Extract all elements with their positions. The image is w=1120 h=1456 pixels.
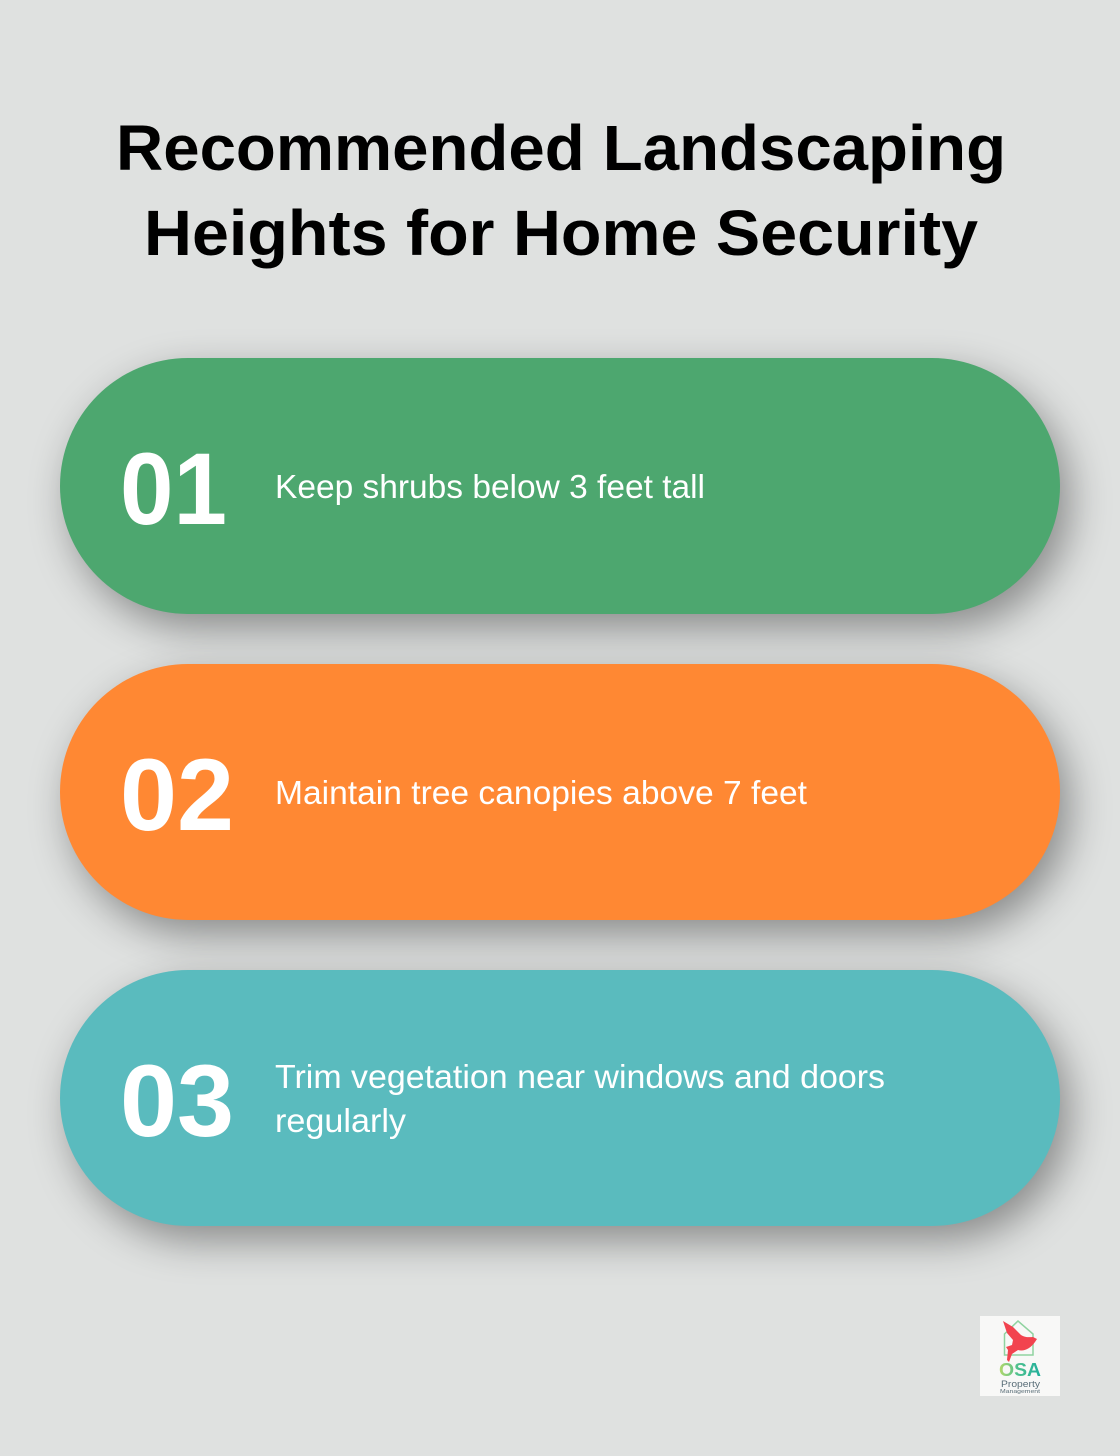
logo subtitle: Property [1001,1379,1041,1389]
panel: step 1 pill [60,358,1060,614]
icon: red bird [1003,1321,1037,1362]
title: Heights for Home Security [144,197,978,269]
panel: step 2 pill [60,664,1060,920]
logo: OSA Property Management [980,1316,1060,1396]
step 2 text: Maintain tree canopies above 7 feet [275,774,807,811]
icon: house outline [1004,1321,1033,1355]
step 2 number: 02 [120,738,234,852]
step 3 number: 03 [120,1044,234,1158]
step 3 text: Trim vegetation near windows and doors [275,1058,885,1095]
logo wordmark: OSA [999,1360,1041,1380]
step 1 text: Keep shrubs below 3 feet tall [275,468,705,505]
panel: step 3 pill [60,970,1060,1226]
step 3 text: regularly [275,1102,407,1139]
logo subtitle 2: Management [1000,1389,1041,1395]
title: Recommended Landscaping [116,112,1006,184]
step 1 number: 01 [120,432,227,546]
step 3 text [275,1058,885,1139]
title [116,112,1006,269]
